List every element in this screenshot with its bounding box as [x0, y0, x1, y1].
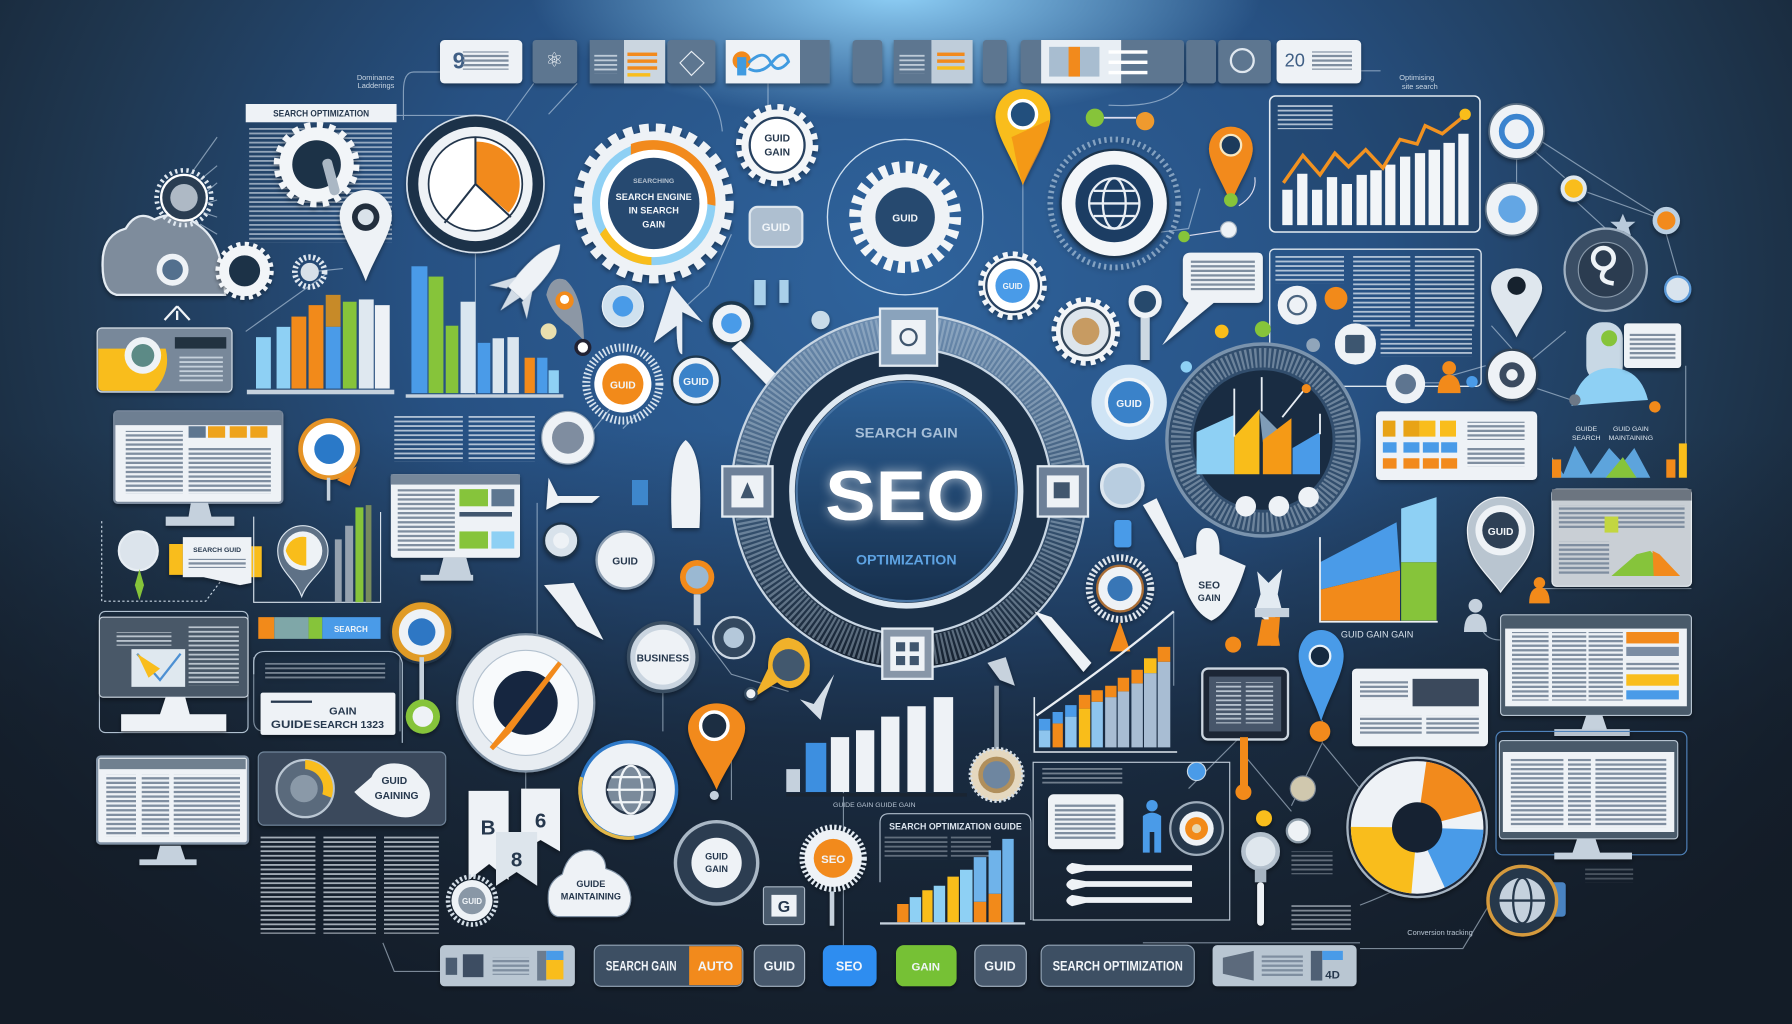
globe badge lower: [580, 742, 677, 838]
orange pin lower: [688, 703, 745, 800]
ring gauge lower: GUID: [705, 851, 728, 861]
ribbon tags: [469, 789, 560, 886]
big progress gear: GAIN: [642, 219, 665, 229]
top tile 1: ⚛: [546, 49, 563, 71]
bar chart left: [247, 295, 394, 394]
key icon: [1131, 288, 1159, 360]
growth line chart panel: [1270, 96, 1480, 232]
SEO title: SEO: [825, 457, 985, 536]
ribbon tags: B: [481, 816, 495, 839]
heading label bar: SEARCH OPTIMIZATION: [273, 109, 369, 119]
mini chart right: [1552, 426, 1687, 478]
right caption: [1407, 869, 1633, 937]
colour strip: [258, 617, 381, 639]
person badge: GAIN: [1198, 593, 1221, 603]
cloud panel: [103, 215, 225, 295]
small captions: Ladderings: [358, 81, 395, 90]
cloud tag: MAINTAINING: [561, 891, 621, 901]
gear badge: GUID: [764, 134, 790, 145]
business badge: [629, 623, 697, 691]
bar panel bottom centre: SEARCH OPTIMIZATION GUIDE: [889, 822, 1022, 832]
big progress gear: SEARCHING: [633, 178, 674, 185]
panel badges: [1278, 286, 1376, 365]
gear wrench: [278, 126, 355, 203]
tiny circles: [602, 280, 830, 389]
right caption: Conversion tracking: [1407, 928, 1473, 937]
ribbon tags: 8: [511, 848, 522, 871]
rocket vertical: [671, 440, 700, 528]
gear ring middle: [827, 139, 983, 295]
bottom button grey one: GUID: [764, 959, 795, 973]
hub handle top: [880, 309, 937, 366]
bottom card left: [440, 945, 575, 986]
text block center left: [394, 414, 535, 462]
circle gauge: [713, 617, 754, 658]
globe badge right: [1488, 866, 1566, 935]
white pin right: [1491, 268, 1542, 337]
row of dots: [1181, 321, 1320, 373]
gear on cloud: [218, 245, 271, 297]
circle badges left of hub: GUID: [612, 557, 638, 568]
big progress gear: [579, 129, 728, 278]
central SEO hub: [722, 309, 1088, 679]
top tile 2: [590, 40, 665, 83]
cloud tag: GUIDE: [576, 879, 605, 889]
white info card: GUIDE: [271, 719, 312, 731]
mini chart right: GUID GAIN: [1613, 426, 1649, 433]
bottom button green: [896, 945, 957, 986]
top tile 6: [1186, 40, 1271, 83]
small captions: [357, 73, 1438, 91]
pie circle: [407, 115, 544, 253]
bottom toolbar: [440, 945, 1357, 986]
magnifier middle: [1102, 465, 1184, 562]
bottom card right: 4D: [1325, 969, 1340, 981]
top wide tile: [1021, 40, 1184, 83]
dark panel with ring and cloud: GAINING: [375, 791, 419, 802]
magnifier tools: [1243, 810, 1310, 926]
orange map pin: [995, 89, 1050, 185]
orange probe: [541, 279, 590, 354]
bar panel bottom centre: [880, 814, 1031, 925]
screen panel: [1552, 489, 1691, 586]
blue badge: GUID: [683, 377, 709, 388]
wrench icon lower: [987, 611, 1091, 749]
ring gauge lower: [675, 822, 758, 904]
hub handle left: [722, 466, 773, 517]
small captions: site search: [1402, 82, 1438, 91]
colour strip: SEARCH: [334, 625, 368, 634]
top tile 5: [983, 40, 1007, 83]
bottom button search: SEARCH GAIN: [606, 958, 677, 973]
tools panel: [1033, 762, 1230, 920]
area chart right: [1320, 497, 1438, 640]
light blue badge: [1091, 365, 1167, 440]
person icons: [1464, 577, 1550, 632]
orange ring target: [1170, 802, 1223, 855]
bottom button grey two: GUID: [984, 959, 1016, 973]
network nodes right: [1486, 104, 1690, 302]
small chip: [750, 207, 802, 247]
monitor three: [99, 611, 248, 733]
small captions: Dominance: [357, 73, 394, 82]
orange gear badge: [802, 827, 864, 926]
monitor one: [114, 411, 282, 526]
bottom button grey two: [975, 945, 1026, 986]
gear badge: [740, 108, 814, 182]
blue tile: [632, 480, 648, 505]
bottom button blue: [823, 945, 877, 986]
color table card: [1376, 411, 1537, 480]
ring gauge lower: GAIN: [705, 864, 728, 874]
person badge: SEO: [1198, 581, 1220, 592]
connector lines: [189, 71, 1691, 971]
hub caption bottom: OPTIMIZATION: [856, 553, 957, 568]
white info card: SEARCH 1323: [313, 720, 384, 731]
blue pin: [1299, 630, 1344, 742]
monitor right one: [1501, 615, 1691, 736]
small probe: [680, 560, 714, 625]
bottom button search: [594, 945, 743, 986]
bottom button search optimization: SEARCH OPTIMIZATION: [1053, 958, 1183, 973]
note card: [1048, 794, 1123, 849]
orange and tan nodes: [1187, 762, 1351, 930]
gear grey badge: GUID: [462, 897, 482, 906]
top card right: 20: [1285, 49, 1305, 70]
gear badge: GAIN: [764, 147, 790, 158]
orange gear badge: SEO: [821, 854, 845, 866]
top card left: [440, 40, 522, 83]
big progress gear: IN SEARCH: [629, 206, 679, 216]
ribbon icon: [1255, 569, 1289, 646]
mini note: [1624, 323, 1681, 368]
person badge: [1177, 528, 1246, 621]
bottom button blue: SEO: [836, 959, 863, 973]
plane small: [546, 478, 600, 510]
yellow card: [97, 328, 232, 392]
hub handle right: [1038, 466, 1088, 517]
gear medal: [970, 749, 1023, 801]
area chart right: GUID GAIN GAIN: [1341, 630, 1413, 640]
thin bars: [335, 526, 353, 602]
tablet: [1202, 669, 1288, 739]
gear ring middle: GUID: [892, 214, 918, 225]
hub caption top: SEARCH GAIN: [855, 426, 958, 441]
pin badge right: [1467, 497, 1534, 592]
white info card: GAIN: [329, 706, 357, 717]
bottom card right: [1213, 945, 1357, 986]
light blue badge: GUID: [1116, 399, 1142, 410]
yellow tabs card: SEARCH GUID: [193, 547, 241, 554]
gear badges middle: GUID: [1003, 282, 1023, 291]
text columns lower left: [261, 837, 439, 934]
white map pin: [340, 190, 392, 281]
big progress gear: SEARCH ENGINE: [616, 192, 692, 202]
wrench rows: [1066, 863, 1192, 906]
white bar chart: GUIDE GAIN GUIDE GAIN: [833, 802, 916, 809]
top white infinity card: [726, 40, 830, 83]
hub handle bottom: [882, 629, 933, 679]
orange magnifier: [745, 638, 810, 699]
donut chart: [1347, 758, 1487, 897]
paper plane: [654, 286, 703, 354]
small person orange: [1386, 361, 1478, 403]
network glyph: [165, 306, 190, 320]
text panel right: [1270, 249, 1481, 386]
monitor right two: [1496, 731, 1687, 859]
orange burst badge: GUID: [610, 381, 636, 392]
circle badges left of hub: [542, 411, 654, 589]
pin dots: [1178, 177, 1255, 242]
gear badges middle: [982, 255, 1117, 362]
dashed note panel: [102, 521, 262, 601]
cloud tag: [548, 850, 631, 917]
speech bubble: [1162, 253, 1263, 345]
bar chart middle: [406, 266, 563, 398]
heading label bar: [246, 104, 397, 122]
white info card: [254, 651, 402, 743]
mini chart right: SEARCH: [1572, 435, 1601, 442]
white report card: [1352, 669, 1488, 746]
monitor two: [391, 474, 520, 581]
code tile: [763, 887, 805, 925]
ascending bar chart: [1034, 611, 1177, 752]
status dots: [1086, 109, 1154, 130]
top card right: [1277, 40, 1361, 83]
magnifier orange blue: [298, 418, 360, 501]
badge note: [119, 531, 158, 570]
top navigation row: [440, 40, 1361, 83]
blue badge: [672, 357, 720, 405]
pods icon: [1569, 322, 1661, 413]
ribbon tags: 6: [535, 809, 546, 832]
blue person: [1143, 800, 1161, 853]
yellow tabs card: [169, 537, 262, 585]
white bar chart: [786, 697, 967, 809]
text block behind gear: [249, 128, 392, 242]
bottom button search optimization: [1041, 945, 1194, 986]
green arrow: [135, 569, 144, 600]
dark emblem: [1565, 229, 1647, 311]
small captions: Optimising: [1399, 73, 1434, 82]
compass ring: [457, 634, 594, 771]
rocket lower: [544, 583, 603, 640]
code tile: G: [778, 899, 790, 916]
area chart gear: [1167, 344, 1359, 536]
mini chart right: MAINTAINING: [1609, 435, 1653, 442]
rocket one: [482, 228, 579, 327]
bottom button search: AUTO: [698, 959, 733, 973]
circle pin: [278, 526, 328, 597]
gear with orange cone: [1089, 558, 1151, 651]
pin badge with bars: [254, 505, 381, 602]
bottom button grey one: [754, 945, 805, 986]
pin badge right: GUID: [1488, 527, 1513, 538]
business badge: BUSINESS: [637, 654, 689, 665]
bottom button green: GAIN: [911, 961, 940, 973]
orange map pin two: [1209, 127, 1253, 203]
gear grey badge: [448, 877, 496, 925]
small chip: GUID: [762, 222, 790, 234]
dark panel with ring and cloud: GUID: [381, 776, 407, 787]
small burst: [295, 257, 325, 287]
globe gear: [1050, 139, 1178, 267]
figure with spokes: [1487, 350, 1537, 400]
top tile 3: [667, 40, 715, 83]
monitor four: [97, 757, 248, 865]
gear top of cloud: [157, 170, 211, 225]
top tile 4: [853, 40, 973, 83]
small plane: [800, 674, 834, 720]
top card left: 9: [453, 48, 465, 74]
top tile 1: [533, 40, 577, 83]
dark panel with ring and cloud: [258, 752, 446, 825]
orange burst badge: [586, 347, 659, 421]
mini chart right: GUIDE: [1575, 426, 1598, 433]
orange stem: [1225, 617, 1280, 800]
blue ring magnifier: [391, 601, 453, 734]
